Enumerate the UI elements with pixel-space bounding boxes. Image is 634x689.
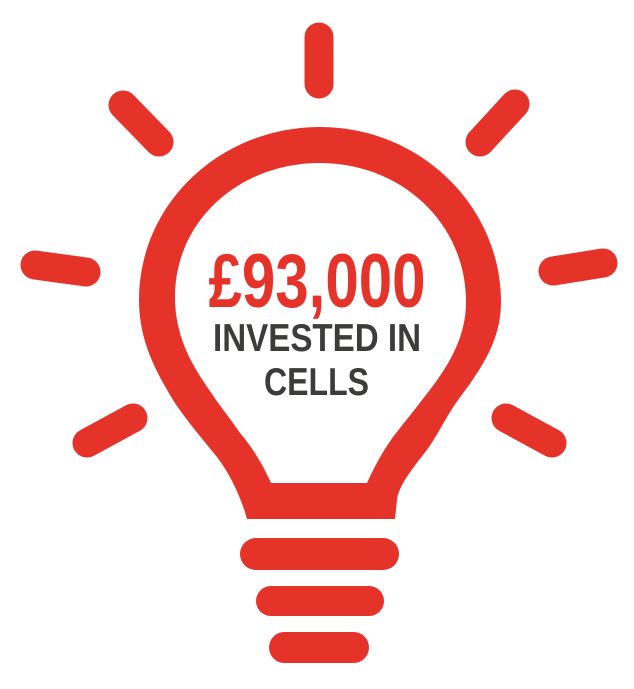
label: invested in: INVESTED IN [213,317,421,360]
icon: bulb base bars [240,538,399,663]
icon: light rays [35,37,603,443]
label: cells: CELLS [264,361,369,404]
icon: bulb outline [139,127,501,519]
amount: £93,000 [208,239,426,324]
